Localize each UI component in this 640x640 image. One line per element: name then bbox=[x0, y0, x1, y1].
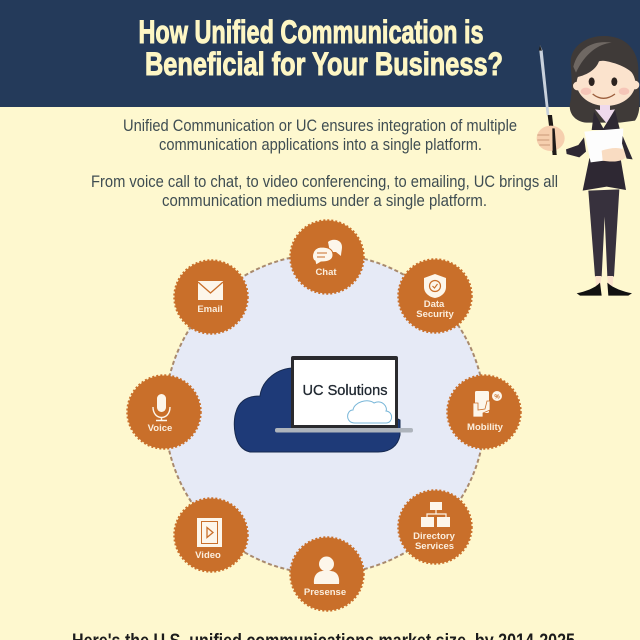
intro text: Unified Communication or UC ensures integration of multiple bbox=[123, 116, 517, 135]
title: How Unified Communication is bbox=[138, 14, 484, 50]
laptop label: UC Solutions bbox=[302, 382, 388, 399]
badge: chat bbox=[290, 220, 364, 294]
small cloud bbox=[348, 401, 392, 423]
header banner bbox=[0, 0, 640, 107]
intro text: From voice call to chat, to video conferencing, to emailing, UC brings all bbox=[91, 172, 558, 191]
badge: mobility bbox=[448, 376, 520, 448]
shoes bbox=[577, 283, 632, 296]
badge: presense: Presense bbox=[304, 587, 346, 598]
badge: directory services: Services bbox=[415, 541, 454, 552]
badge: data security bbox=[398, 260, 472, 332]
badge: data security: Security bbox=[416, 309, 454, 320]
pointer stick bbox=[539, 45, 557, 155]
badge: email bbox=[174, 260, 248, 334]
badge: video bbox=[174, 498, 248, 572]
cloud with laptop bbox=[234, 356, 413, 452]
diagram: unified communication wheel bbox=[128, 220, 520, 610]
badge: email: Email bbox=[197, 304, 223, 315]
character: presenter with pointer bbox=[537, 36, 640, 296]
intro text bbox=[91, 116, 558, 210]
badge: mobility: Mobility bbox=[467, 422, 504, 433]
title: Beneficial for Your Business? bbox=[145, 46, 503, 82]
paper bbox=[584, 128, 623, 162]
title bbox=[138, 14, 503, 82]
central dashed circle bbox=[165, 254, 485, 574]
badge: voice: Voice bbox=[148, 423, 172, 434]
jacket bbox=[583, 155, 626, 191]
badge: data security: Data bbox=[424, 299, 445, 310]
badge: presense bbox=[290, 538, 364, 610]
badge: directory services bbox=[398, 490, 472, 564]
badge: video: Video bbox=[195, 550, 221, 561]
trousers bbox=[588, 189, 619, 277]
intro text: communication mediums under a single platform. bbox=[162, 191, 487, 210]
badge: mobility: % bbox=[494, 394, 500, 400]
badge: chat: Chat bbox=[315, 267, 337, 278]
badge: voice bbox=[128, 376, 200, 448]
hand and arm bbox=[537, 126, 586, 157]
intro text: communication applications into a single platform. bbox=[159, 135, 482, 154]
badge: directory services: Directory bbox=[413, 531, 456, 542]
